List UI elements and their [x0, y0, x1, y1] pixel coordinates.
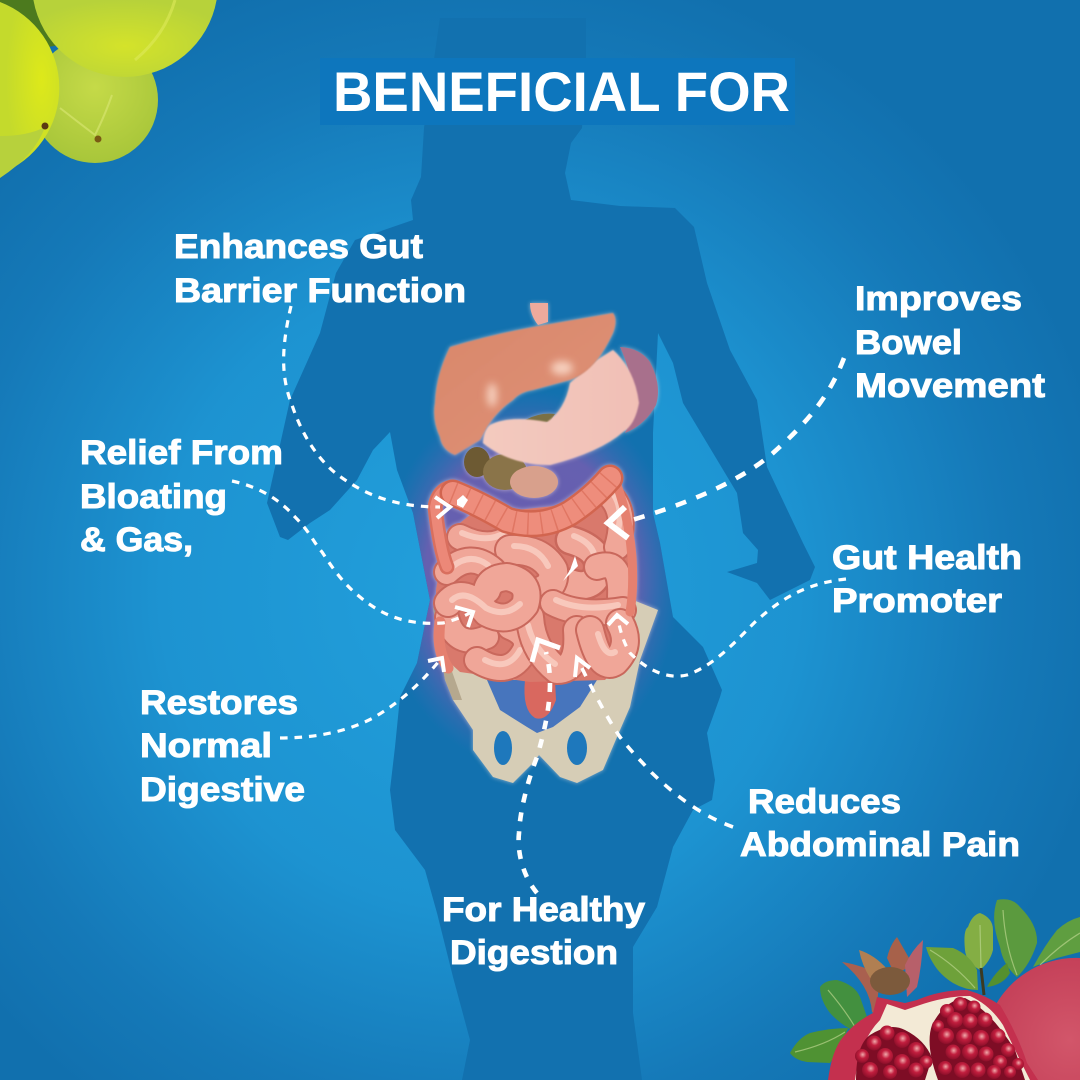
leaves: [790, 899, 1080, 1063]
label: Restores Normal Digestive: Restores: [140, 684, 298, 722]
fruit back: [984, 958, 1080, 1080]
label: Relief From Bloating & Gas: Relief From: [80, 434, 283, 472]
label: Restores Normal Digestive: [140, 684, 305, 809]
label: Reduces Abdominal Pain: [740, 783, 1020, 864]
label: Enhances Gut Barrier Function: [174, 228, 466, 310]
arrow: Improves Bowel Movement: [608, 358, 844, 538]
arrow: Reduces Abdominal Pain: [575, 658, 733, 827]
arrow: Gut Health Promoter: [608, 579, 846, 676]
stomach: [483, 350, 639, 465]
arrow: For Healthy Digestion: [519, 640, 560, 893]
fruit front: [828, 990, 1038, 1080]
spleen: [620, 347, 658, 433]
label: Restores Normal Digestive: Normal: [140, 727, 272, 765]
liver highlights: [487, 361, 573, 407]
label: Improves Bowel Movement: Bowel: [855, 324, 962, 362]
label: Improves Bowel Movement: Movement: [855, 367, 1045, 405]
arrow: Relief From Bloating: [232, 481, 473, 627]
label: Gut Health Promoter: Gut Health: [832, 539, 1022, 577]
pelvis: [433, 600, 658, 783]
label: Enhances Gut Barrier Function: Barrier Function: [174, 272, 466, 310]
arils: [855, 997, 1025, 1080]
label: Relief From Bloating & Gas: Bloating: [80, 478, 227, 516]
label: Reduces Abdominal Pain: Reduces: [748, 783, 901, 821]
label: For Healthy Digestion: For Healthy: [442, 891, 645, 929]
label: For Healthy Digestion: [442, 891, 645, 972]
purple glow behind organs: [406, 399, 671, 760]
label: For Healthy Digestion: Digestion: [450, 934, 618, 972]
label: Gut Health Promoter: [832, 539, 1022, 620]
large intestine (colon): [435, 475, 633, 612]
label: Gut Health Promoter: Promoter: [832, 582, 1002, 620]
fruit: amla top-left: [0, 0, 217, 178]
small brown organs: [464, 414, 558, 498]
liver: [434, 313, 616, 455]
label: Relief From Bloating & Gas: & Gas,: [80, 521, 193, 559]
illustration: digestive organs: [433, 303, 658, 783]
ascending colon lower: [439, 622, 448, 668]
label: Enhances Gut Barrier Function: Enhances Gut: [174, 228, 423, 266]
arrow: Enhances Gut Barrier: [284, 306, 450, 518]
body silhouette: [267, 18, 815, 1080]
label: Reduces Abdominal Pain: Abdominal Pain: [740, 826, 1020, 864]
label: Restores Normal Digestive: Digestive: [140, 771, 305, 809]
small intestine: [436, 490, 634, 682]
arrow: Restores Normal Digestive: [280, 658, 444, 738]
crown: [842, 937, 923, 1015]
label: Improves Bowel Movement: Improves: [855, 280, 1022, 318]
label: Improves Bowel Movement: [855, 280, 1045, 405]
label: Relief From Bloating & Gas: [80, 434, 283, 559]
white highlights: [457, 495, 578, 581]
rectum: [524, 680, 556, 719]
fruit: pomegranates and leaves bottom-right: [790, 899, 1080, 1080]
esophagus: [530, 303, 548, 325]
title: BENEFICIAL FOR: [333, 60, 790, 123]
